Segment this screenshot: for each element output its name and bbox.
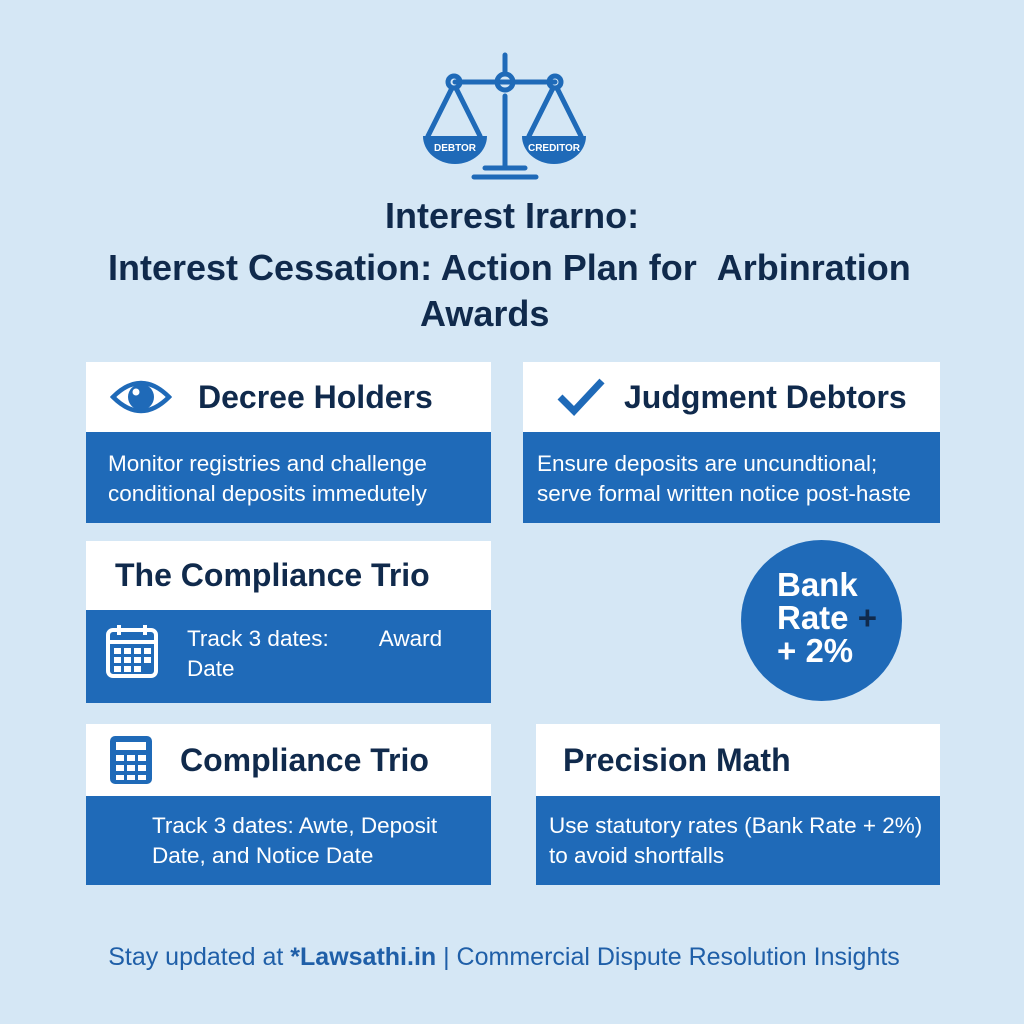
icon: calendar	[106, 625, 158, 678]
text block	[86, 432, 491, 523]
heading	[86, 541, 491, 610]
text block: Date, and Notice Date	[152, 843, 373, 868]
footer: Stay updated at *Lawsathi.in | Commercial Dispute Resolution Insights	[108, 943, 900, 971]
heading: Compliance Trio	[180, 742, 429, 778]
callout: bank rate circle: Rate +	[777, 599, 877, 636]
title: Interest Irarno:	[385, 195, 639, 236]
text block: Monitor registries and challenge	[108, 451, 427, 476]
icon: scales	[423, 52, 586, 180]
heading	[86, 724, 491, 796]
callout: bank rate circle	[741, 540, 902, 701]
text block with calendar icon	[86, 610, 491, 703]
callout: bank rate circle: + 2%	[777, 632, 853, 669]
text block	[536, 796, 940, 885]
text block	[86, 796, 491, 885]
panel: the compliance trio	[86, 541, 491, 703]
title	[108, 195, 911, 334]
title: Interest Cessation: Action Plan for Arbinration	[108, 247, 911, 288]
panel: decree holders	[86, 362, 491, 523]
text block: to avoid shortfalls	[549, 843, 724, 868]
heading	[536, 724, 940, 796]
heading: The Compliance Trio	[115, 557, 430, 593]
panel: compliance trio	[86, 724, 491, 885]
heading: judgment debtors: Judgment Debtors	[624, 378, 907, 414]
text block with calendar icon: Date	[187, 656, 235, 681]
text block: Use statutory rates (Bank Rate + 2%)	[549, 813, 922, 838]
text block: Track 3 dates: Awte, Deposit	[152, 813, 437, 838]
icon: scales: CREDITOR	[528, 143, 581, 154]
text block	[523, 432, 940, 523]
text block: Ensure deposits are uncundtional;	[537, 451, 877, 476]
heading: decree holders	[86, 362, 491, 432]
heading: Precision Math	[563, 742, 791, 778]
panel: judgment debtors	[523, 362, 940, 523]
text block: serve formal written notice post-haste	[537, 481, 911, 506]
heading: decree holders: Decree Holders	[198, 378, 433, 414]
heading: judgment debtors	[523, 362, 940, 432]
title: Awards	[420, 293, 549, 334]
text block: conditional deposits immedutely	[108, 481, 427, 506]
text block with calendar icon: Track 3 dates: Award	[187, 626, 442, 651]
callout: bank rate circle: Bank	[777, 566, 858, 603]
icon: scales: DEBTOR	[434, 143, 477, 154]
panel: precision math	[536, 724, 940, 885]
